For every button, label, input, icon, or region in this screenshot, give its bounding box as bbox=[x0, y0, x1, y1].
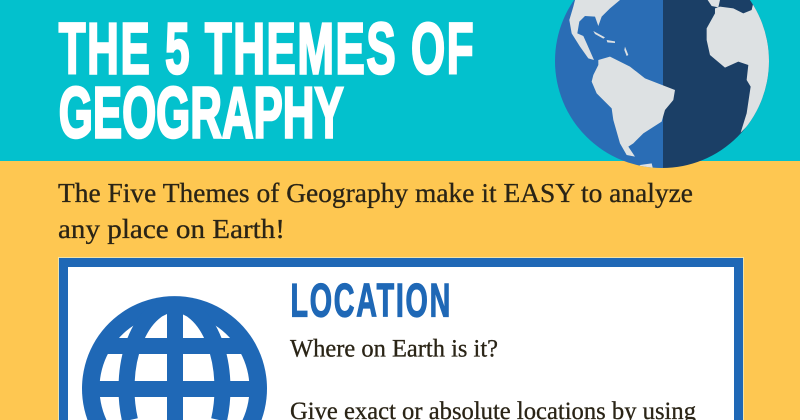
header band bbox=[0, 0, 800, 161]
intro text: any place on Earth! bbox=[58, 214, 285, 244]
title bbox=[59, 8, 474, 153]
icon: globe bbox=[82, 296, 267, 420]
body text bbox=[290, 336, 696, 420]
title: THE 5 THEMES OF bbox=[59, 8, 474, 89]
panel: location card bbox=[58, 257, 744, 420]
heading: location: LOCATION bbox=[290, 275, 450, 327]
intro text: The Five Themes of Geography make it EASY to analyze bbox=[58, 178, 693, 208]
intro text bbox=[58, 178, 693, 244]
earth globe illustration bbox=[555, 0, 773, 170]
body text: Where on Earth is it? bbox=[290, 336, 498, 362]
yellow background bbox=[0, 161, 800, 420]
title: GEOGRAPHY bbox=[59, 72, 344, 153]
